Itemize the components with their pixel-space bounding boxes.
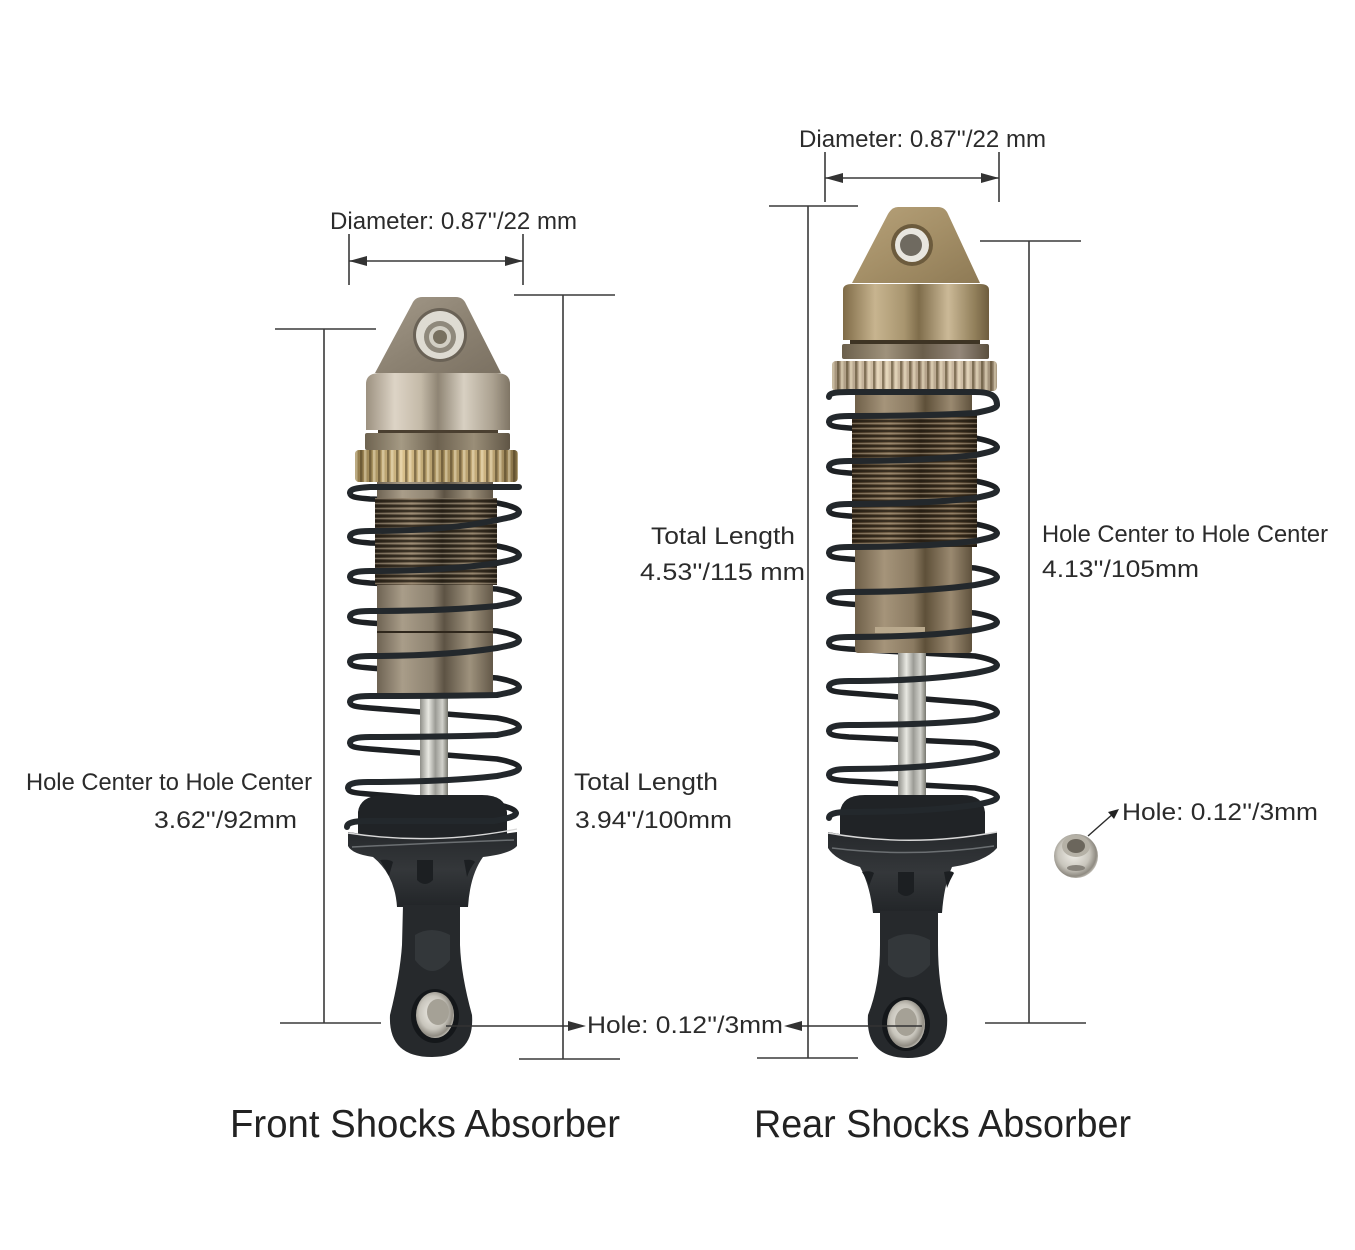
front hole center dimension [275, 329, 381, 1023]
front lower cup [358, 795, 507, 840]
rear spring rear coils [829, 422, 997, 797]
rear diameter label: Diameter: 0.87''/22 mm [799, 126, 1046, 153]
loose ball hole label: Hole: 0.12''/3mm [1122, 799, 1318, 826]
arrow: loose ball hole [1088, 809, 1119, 836]
front spring front coils [347, 487, 519, 827]
rear cap [843, 284, 989, 340]
rear rod end [868, 911, 947, 1058]
rear spring front coils [829, 392, 997, 818]
front bottom ball joint [411, 989, 459, 1043]
front cone ribs [380, 860, 475, 884]
front diameter label: Diameter: 0.87''/22 mm [330, 208, 577, 235]
front piston rod [420, 688, 448, 798]
front collar ring [365, 433, 510, 450]
caption: rear: Rear Shocks Absorber [754, 1103, 1131, 1146]
front hole center label [26, 769, 312, 834]
rear total length label: Total Length [651, 523, 795, 550]
rear cone ribs [862, 871, 954, 896]
rear top mount [852, 207, 980, 283]
rear lower body [855, 391, 972, 653]
rear diameter dimension [825, 152, 999, 202]
front total length label [574, 769, 732, 834]
front top eyelet [413, 308, 467, 362]
rear collar ring [842, 340, 989, 359]
rear bottom ball joint [882, 997, 930, 1051]
rear shock absorber [828, 207, 997, 1058]
hole label: Hole: 0.12''/3mm [587, 1012, 783, 1039]
loose ball joint [1054, 834, 1098, 878]
front total length label: Total Length [574, 769, 718, 796]
rear threaded body [852, 413, 977, 547]
rear lower cup [840, 795, 985, 847]
front cap [366, 373, 510, 433]
rear hole center dimension [980, 241, 1086, 1023]
rear total length label: 4.53''/115 mm [640, 559, 805, 586]
rear hole center label [1042, 521, 1328, 583]
front rod end [390, 905, 472, 1057]
rear top eyelet [891, 224, 933, 266]
front hole arrow [446, 1021, 586, 1031]
rear total length label [640, 523, 805, 586]
rear flange and cone [828, 832, 997, 913]
front top mount [375, 297, 501, 373]
front threaded body [375, 498, 497, 585]
front shock absorber [347, 297, 519, 1057]
rear hole arrow [784, 1021, 922, 1031]
front total length label: 3.94''/100mm [575, 807, 732, 834]
rear knurled nut [832, 361, 997, 391]
front flange highlights [348, 829, 517, 847]
front diameter dimension [349, 234, 523, 285]
rear total length dimension [757, 206, 858, 1058]
front spring rear coils [348, 493, 519, 813]
front lower body [377, 481, 493, 693]
rear hole center label: 4.13''/105mm [1042, 556, 1199, 583]
rear flange highlights [828, 832, 997, 853]
front total length dimension [514, 295, 620, 1059]
rear piston rod [898, 650, 926, 808]
caption: front: Front Shocks Absorber [230, 1103, 620, 1146]
front flange and cone [348, 832, 517, 907]
rear hole center label: Hole Center to Hole Center [1042, 521, 1328, 548]
front knurled nut [355, 450, 518, 482]
front hole center label: Hole Center to Hole Center [26, 769, 312, 796]
front hole center label: 3.62''/92mm [154, 807, 297, 834]
